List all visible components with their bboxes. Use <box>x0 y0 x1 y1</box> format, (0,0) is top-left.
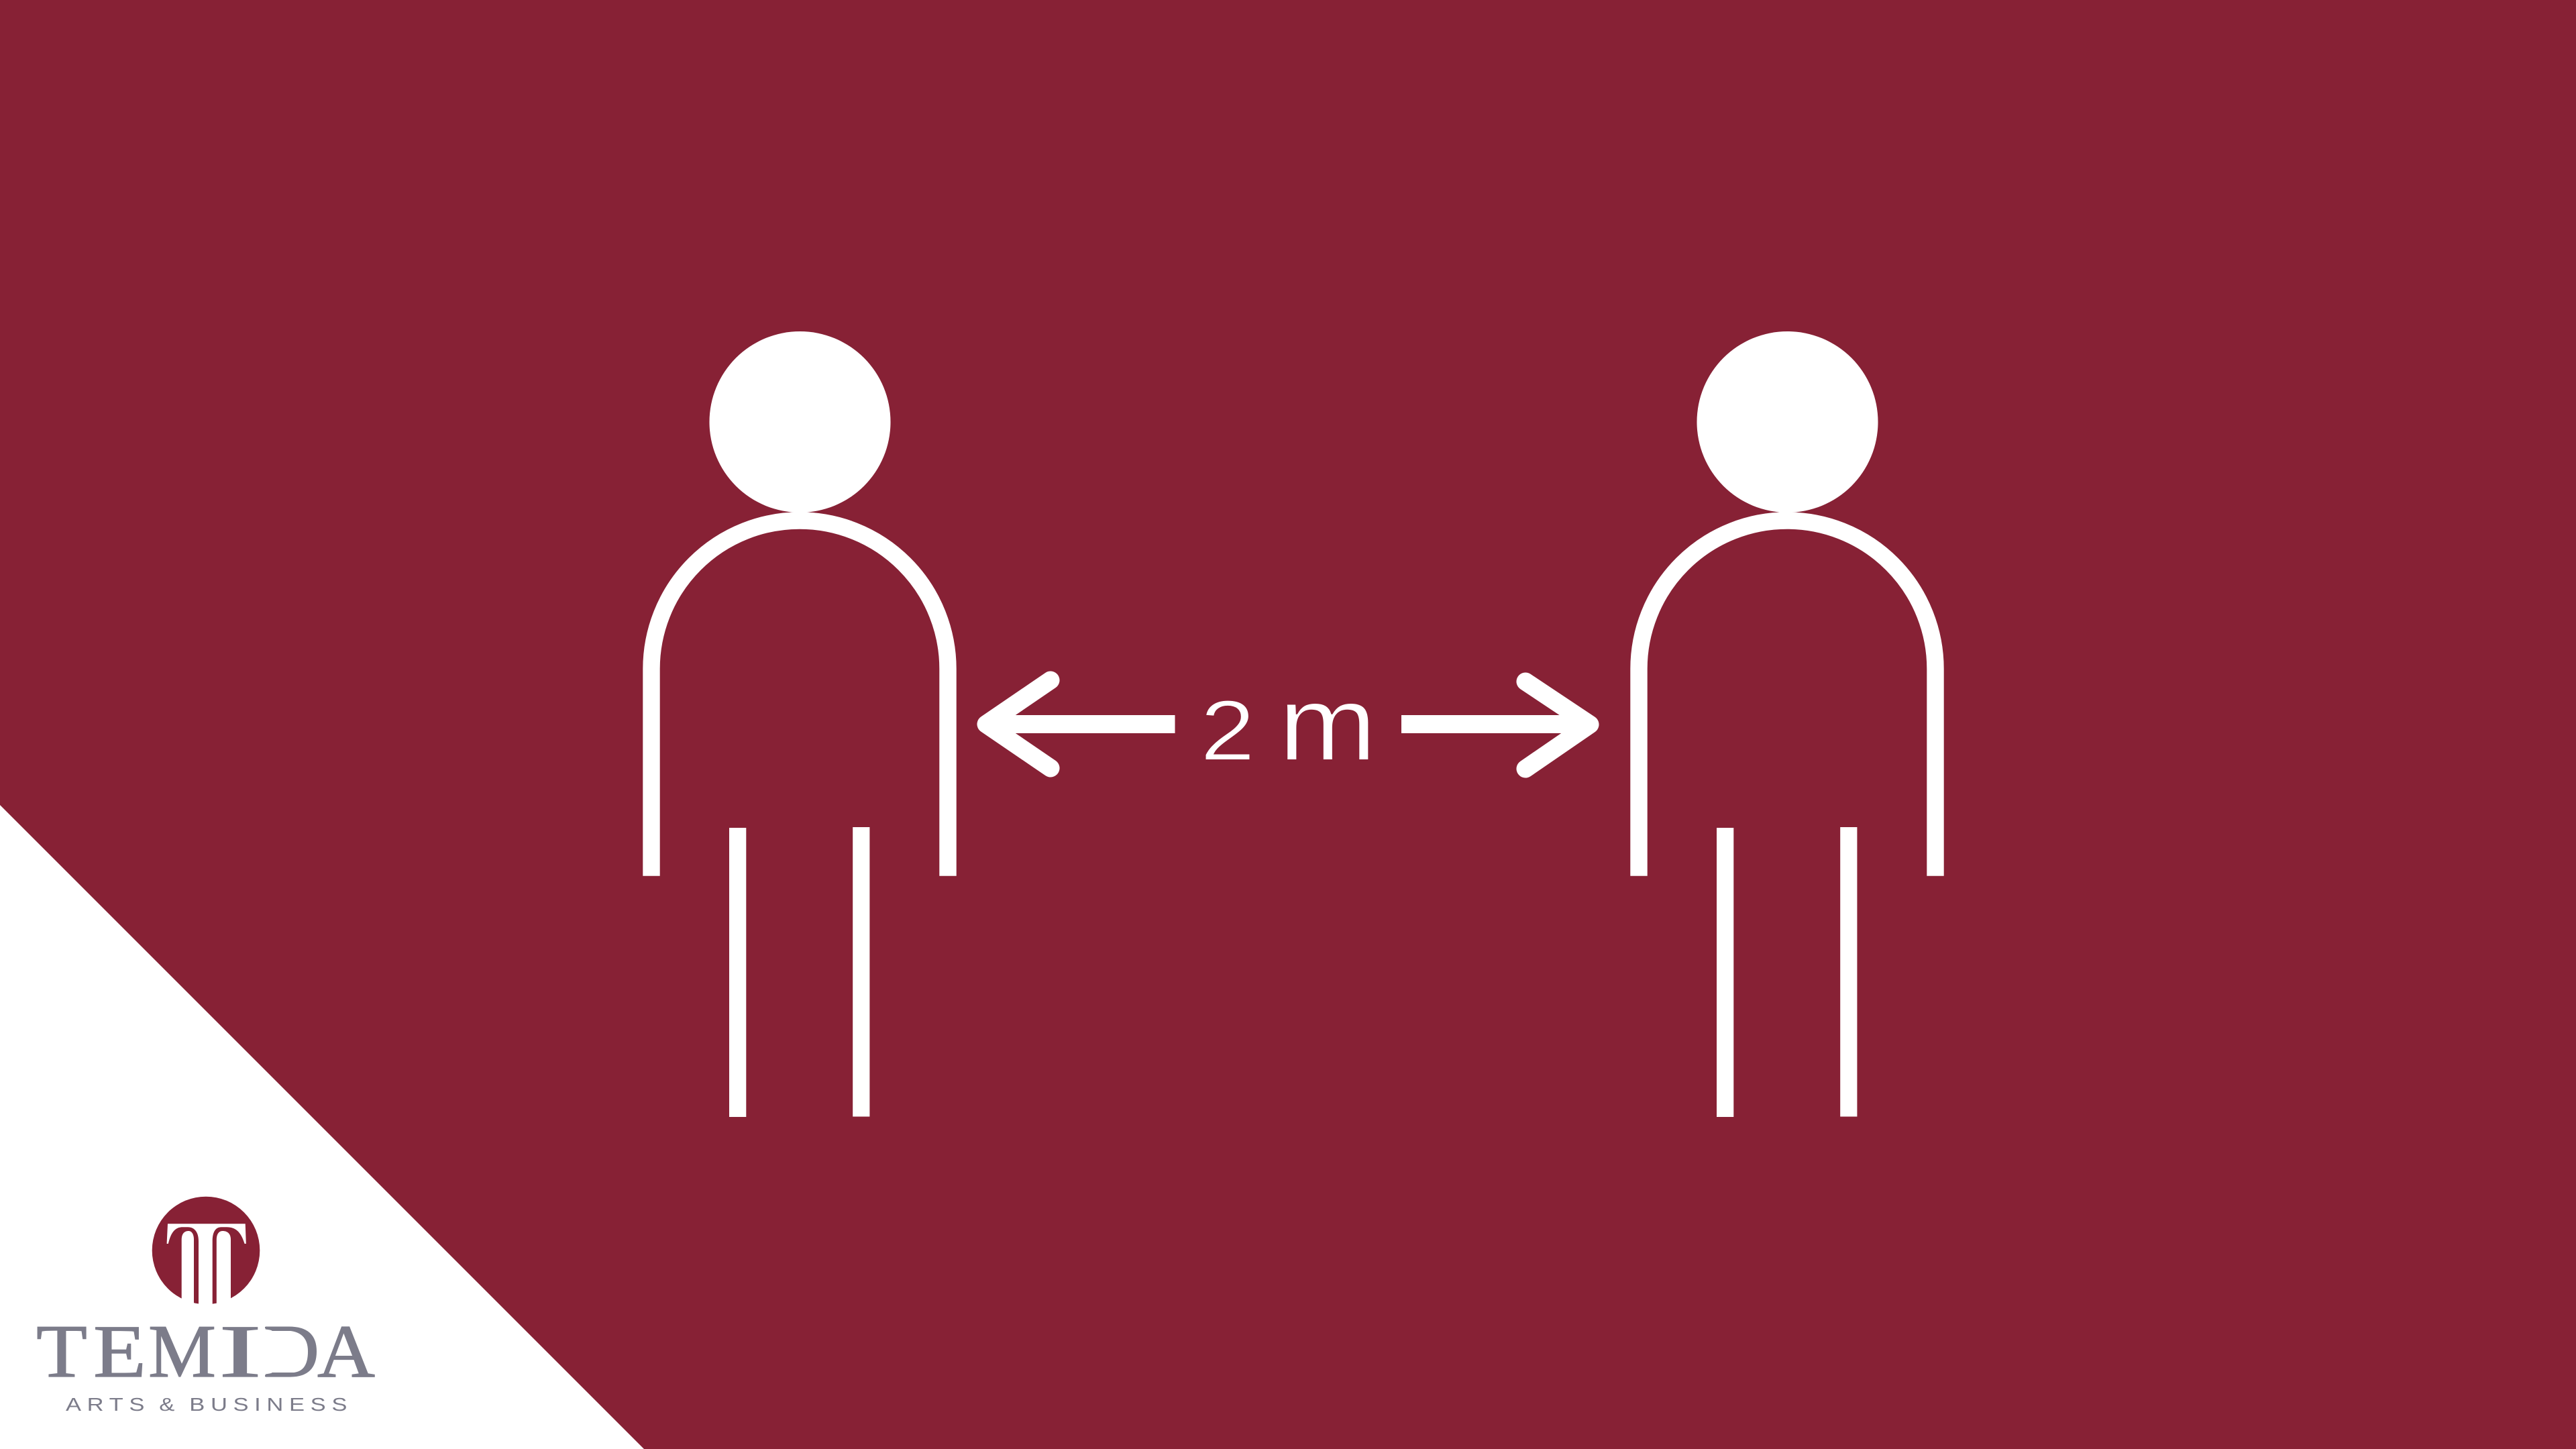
distance label <box>1200 665 1377 783</box>
logo wordmark: M <box>148 1310 216 1393</box>
logo wordmark: D <box>264 1310 319 1393</box>
icon: left person <box>651 331 948 1117</box>
logo emblem <box>152 1197 260 1308</box>
body outline <box>1639 521 1935 876</box>
logo wordmark: T <box>36 1310 87 1393</box>
distance label: m <box>1279 665 1377 783</box>
head <box>710 331 891 513</box>
arrow: pointing right <box>1401 682 1590 769</box>
logo: Temida Arts & Business <box>36 1197 375 1415</box>
head <box>1697 331 1878 513</box>
logo wordmark: A <box>317 1310 375 1393</box>
logo wordmark: E <box>93 1310 146 1393</box>
left leg <box>729 828 746 1117</box>
arrow: pointing left <box>986 680 1175 768</box>
right leg <box>853 827 869 1116</box>
body outline <box>651 521 948 876</box>
icon: right person <box>1639 331 1935 1117</box>
distance label: 2 <box>1200 683 1255 779</box>
right leg <box>1840 827 1857 1116</box>
logo wordmark: I <box>219 1310 262 1393</box>
logo wordmark <box>36 1310 375 1393</box>
white corner triangle <box>0 805 644 1449</box>
left leg <box>1717 828 1733 1117</box>
logo tagline: ARTS & BUSINESS <box>66 1394 353 1415</box>
